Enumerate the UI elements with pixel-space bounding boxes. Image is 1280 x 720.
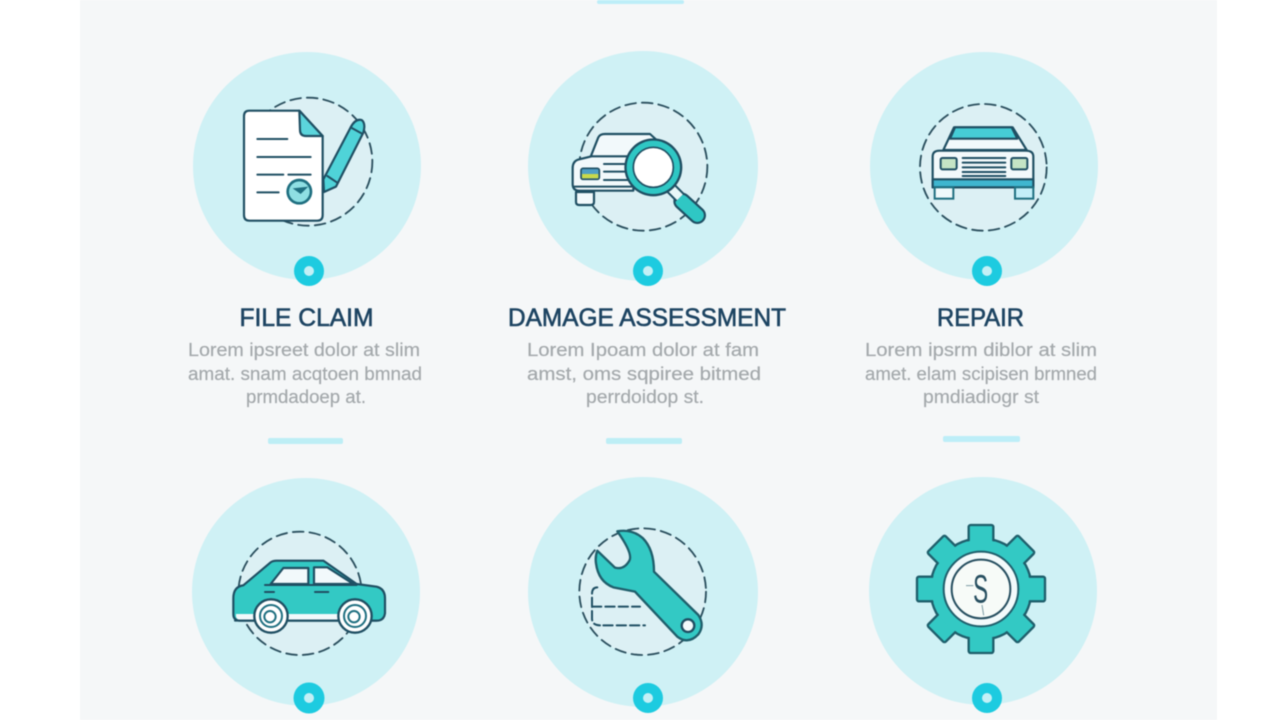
- description: file claim: [188, 339, 422, 407]
- description: damage assessment: Lorem Ipoam dolor at fam: [527, 339, 759, 360]
- top accent bar: [597, 0, 684, 4]
- icon: car and magnifier: [573, 103, 707, 231]
- connector dot: [294, 256, 324, 286]
- description: damage assessment: [527, 339, 761, 407]
- step: damage assessment: [508, 51, 786, 444]
- description: file claim: amat. snam acqtoen bmnad: [188, 363, 422, 384]
- divider bar: [606, 438, 682, 444]
- divider bar: [943, 436, 1020, 442]
- icon: gear with dollar sign: S: [973, 568, 988, 612]
- circle badge: payment gear: [869, 477, 1097, 705]
- connector dot: [633, 683, 663, 713]
- circle badge: repair: [870, 52, 1098, 280]
- description: file claim: Lorem ipsreet dolor at slim: [188, 339, 420, 360]
- circle badge: file claim: [193, 52, 421, 280]
- circle badge: damage assessment: [528, 51, 758, 281]
- step: repair: [865, 52, 1098, 442]
- step: payment gear: [869, 477, 1097, 713]
- icon: car front view: [920, 104, 1047, 231]
- description: damage assessment: amst, oms sqpiree bitmed: [527, 363, 761, 384]
- heading: damage assessment: DAMAGE ASSESSMENT: [508, 304, 786, 332]
- icon: wrench: [579, 528, 706, 655]
- description: file claim: prmdadoep at.: [246, 386, 366, 407]
- step: car side: [192, 478, 420, 714]
- circle badge: wrench: [528, 477, 758, 707]
- step: file claim: [188, 52, 422, 444]
- heading: repair: REPAIR: [937, 304, 1024, 332]
- heading: file claim: FILE CLAIM: [240, 304, 374, 332]
- circle badge: car side: [192, 478, 420, 706]
- icon: gear with dollar sign: [917, 525, 1045, 653]
- description: repair: Lorem ipsrm diblor at slim: [865, 339, 1097, 360]
- icon: document and pencil: [244, 98, 372, 226]
- description: damage assessment: perrdoidop st.: [586, 386, 704, 407]
- connector dot: [972, 256, 1002, 286]
- step: wrench: [528, 477, 758, 713]
- connector dot: [972, 683, 1002, 713]
- connector dot: [633, 256, 663, 286]
- connector dot: [294, 682, 324, 714]
- description: repair: pmdiadiogr st: [923, 386, 1039, 407]
- divider bar: [268, 438, 343, 444]
- description: repair: [865, 339, 1097, 407]
- icon: car side view: [233, 532, 385, 655]
- description: repair: amet. elam scipisen brmned: [865, 363, 1097, 384]
